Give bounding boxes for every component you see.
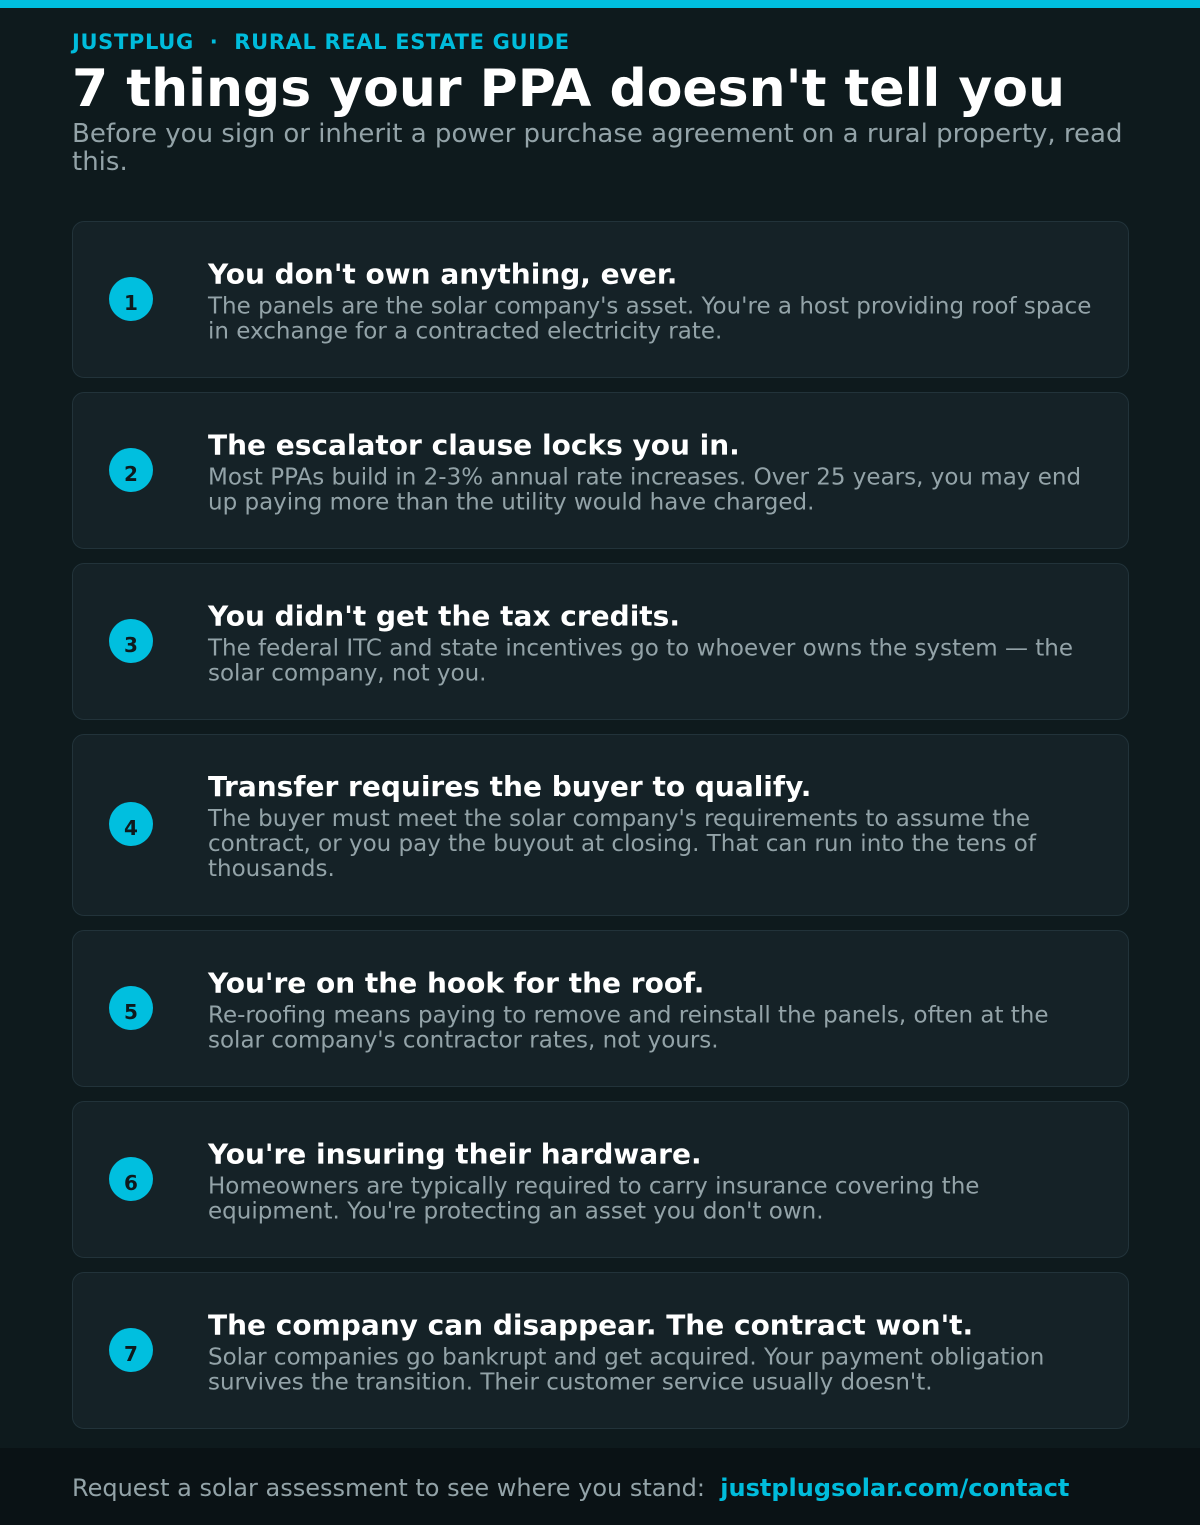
footer: Request a solar assessment to see where you stand: justplugsolar.com/contact xyxy=(72,1474,1069,1502)
card 1: You don't own anything, ever. xyxy=(208,257,677,290)
card 1: The panels are the solar company's asset. You're a host providing roof space in exchange for a contracted electricity rate. xyxy=(208,293,1091,344)
card 5: You're on the hook for the roof. xyxy=(208,966,704,999)
card 2: The escalator clause locks you in. xyxy=(208,428,740,461)
card 5: Re-roofing means paying to remove and reinstall the panels, often at the solar company's contractor rates, not yours. xyxy=(208,1002,1049,1053)
card 5 xyxy=(72,930,1129,1087)
card 4: Transfer requires the buyer to qualify. xyxy=(208,770,811,803)
card 2 xyxy=(72,392,1129,549)
card 7 xyxy=(72,1272,1129,1429)
card 5: 5 xyxy=(124,1000,138,1024)
card 7: The company can disappear. The contract won't. xyxy=(208,1308,973,1341)
card 2: 2 xyxy=(124,462,138,486)
card 1: 1 xyxy=(124,290,138,314)
card 7: 7 xyxy=(124,1342,138,1366)
card 6 xyxy=(72,1101,1129,1258)
card 4 xyxy=(72,734,1129,916)
subtitle: Before you sign or inherit a power purchase agreement on a rural property, read this. xyxy=(72,119,1122,177)
card 4: 4 xyxy=(124,816,138,840)
card 3: You didn't get the tax credits. xyxy=(208,599,680,632)
card 3: 3 xyxy=(124,632,138,656)
card 1 xyxy=(72,221,1129,378)
card 2: Most PPAs build in 2-3% annual rate increases. Over 25 years, you may end up paying more than the utility would have charged. xyxy=(208,464,1081,515)
card 3: The federal ITC and state incentives go to whoever owns the system — the solar company, not you. xyxy=(208,635,1073,686)
kicker: JUSTPLUG · RURAL REAL ESTATE GUIDE xyxy=(72,30,570,54)
card 6: Homeowners are typically required to carry insurance covering the equipment. You're protecting an asset you don't own. xyxy=(208,1173,979,1224)
title: 7 things your PPA doesn't tell you xyxy=(72,59,1065,119)
card 7: Solar companies go bankrupt and get acquired. Your payment obligation survives the transition. Their customer service usually doesn't. xyxy=(208,1344,1044,1395)
footer xyxy=(0,1448,1200,1525)
card 4: The buyer must meet the solar company's requirements to assume the contract, or you pay the buyout at closing. That can run into the tens of thousands. xyxy=(208,806,1036,882)
card 3 xyxy=(72,563,1129,720)
card 6: You're insuring their hardware. xyxy=(208,1137,702,1170)
card 6: 6 xyxy=(124,1170,138,1194)
